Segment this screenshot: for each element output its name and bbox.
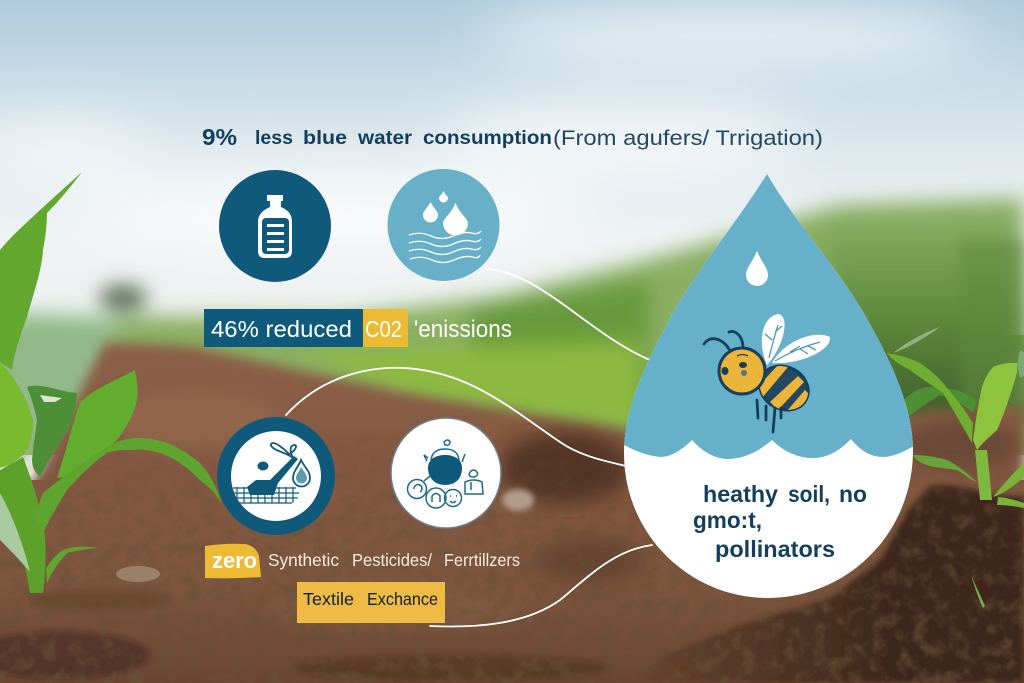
label: zero synthetic pesticides: Ferrtillzers (444, 550, 520, 570)
soil (0, 480, 1024, 683)
left corn plant (0, 172, 222, 593)
heading: blue water: (From agufers/ Trrigation) (553, 127, 823, 150)
icon: bee (704, 314, 830, 432)
water drop panel (624, 174, 913, 598)
label: zero synthetic pesticides: Synthetic (268, 550, 339, 570)
drop text: healthy soil: pollinators (715, 536, 835, 562)
soil grain (0, 430, 1024, 683)
drop text: healthy soil: soil, (788, 481, 830, 507)
connector lines (286, 269, 652, 627)
label: zero synthetic pesticides: zero (212, 548, 257, 573)
icon: water drops and waves (388, 169, 500, 281)
label: zero synthetic pesticides (205, 544, 520, 578)
heading: blue water: consumption (423, 128, 552, 149)
icon: pesticide sprayer in ring (217, 417, 335, 535)
label: zero synthetic pesticides: Pesticides/ (352, 550, 432, 570)
drop text: healthy soil: gmo:t, (693, 507, 762, 533)
icon: bottle in dark circle (219, 170, 331, 282)
heading: blue water: less (255, 128, 293, 149)
label: 46% reduced CO2 emissions (204, 309, 512, 347)
horizon vegetation (0, 335, 1024, 455)
drop text: healthy soil (693, 481, 867, 562)
label: 46% reduced CO2 emissions: 46% reduced (211, 316, 352, 342)
drop text: healthy soil: heathy (703, 481, 778, 507)
icon: textile goods in white circle (391, 418, 501, 528)
right corn plant (887, 327, 1024, 608)
heading: blue water: water (357, 128, 413, 149)
heading: blue water: 9% (202, 124, 237, 150)
heading: blue water: blue (303, 128, 347, 149)
heading: blue water (202, 124, 823, 150)
drop text: healthy soil: no (839, 481, 867, 507)
label: 46% reduced CO2 emissions: 'enissions (414, 316, 512, 343)
badge: Textile Exchance: Exchance (367, 589, 438, 609)
badge: Textile Exchance: Textile (303, 589, 354, 609)
icon: small white drop (746, 251, 768, 286)
badge: Textile Exchance (297, 582, 445, 623)
label: 46% reduced CO2 emissions: C02 (365, 316, 402, 342)
